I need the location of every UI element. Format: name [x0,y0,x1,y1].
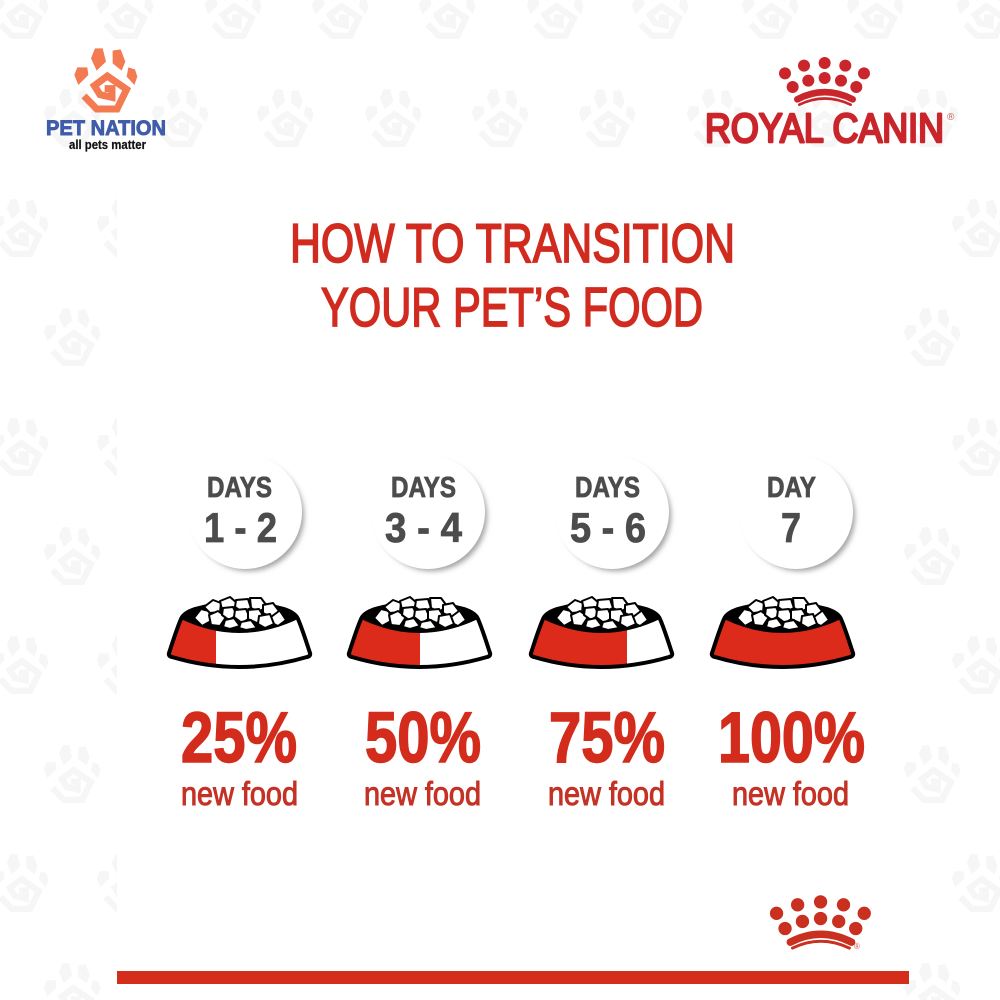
percentage: 50% [365,699,481,778]
day badge: DAYS [391,472,456,504]
day badge: 5 - 6 [570,504,646,551]
day badge: 1 - 2 [204,504,277,551]
icon: orange paw [74,48,137,109]
bottom red bar [117,971,909,984]
bowl 75% [531,597,672,667]
Royal Canin logo [705,57,955,151]
step 1: days 1-2 [169,455,310,812]
icon: bottom crown [770,895,871,951]
Pet Nation logo [46,48,166,152]
bowl 100% [712,597,853,667]
day badge [555,455,671,571]
wordmark: ROYAL CANIN [705,105,944,151]
day badge [371,455,487,571]
title: YOUR PET’S FOOD [321,276,703,338]
caption: new food [181,775,298,812]
step 2: days 3-4 [349,455,490,812]
day badge: 3 - 4 [385,504,463,551]
day badge: DAY [767,472,816,504]
caption: new food [364,775,481,812]
title [290,212,735,338]
percentage: 100% [718,699,865,778]
caption: new food [548,775,665,812]
bowl 50% [349,597,490,667]
icon: bottom crown: ® [854,942,860,951]
brand name: PET NATION [46,117,166,140]
caption: new food [732,775,849,812]
day badge: 7 [781,504,801,551]
day badge: DAYS [575,472,640,504]
day badge: DAYS [207,472,272,504]
percentage: 75% [549,699,665,778]
day badge [188,455,304,571]
step 3: days 5-6 [531,455,672,812]
day badge [739,455,855,571]
tagline: all pets matter [69,138,146,152]
step 4: day 7 [712,455,865,812]
percentage: 25% [181,699,297,778]
title: HOW TO TRANSITION [290,212,735,274]
registered mark: ® [947,112,955,123]
icon: crown [779,57,870,105]
bowl 25% [169,597,310,667]
